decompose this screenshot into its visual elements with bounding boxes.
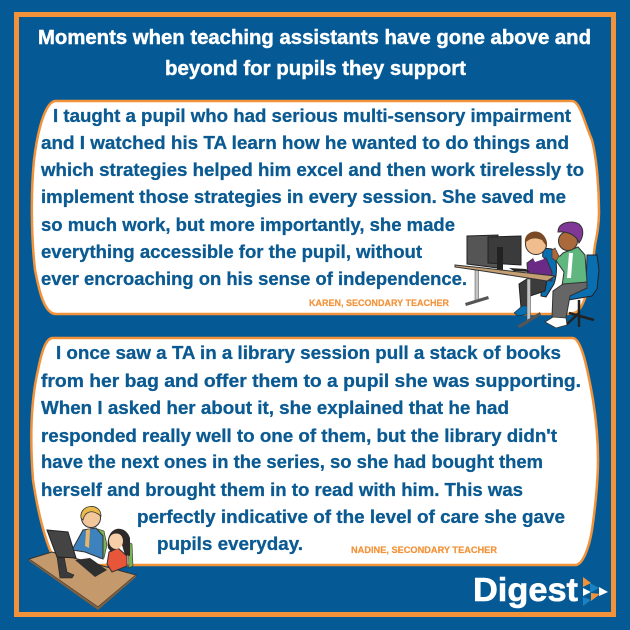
desk — [29, 552, 136, 607]
illustration: teacher and pupil at a desk — [29, 506, 136, 610]
quote text — [40, 105, 584, 289]
icon: triangles — [583, 577, 608, 606]
logo: Digest — [473, 571, 608, 608]
quote text: implement those strategies in every session. She saved me — [41, 186, 566, 207]
title: Moments when teaching assistants have gone above and — [38, 26, 591, 49]
quote text: which strategies helped him excel and then work tirelessly to — [40, 159, 584, 180]
pupil chair — [541, 248, 556, 297]
quote text: perfectly indicative of the level of care she gave — [137, 506, 565, 527]
title — [38, 26, 591, 80]
quote text: I taught a pupil who had serious multi-sensory impairment — [53, 105, 571, 126]
TA chair — [568, 255, 599, 300]
illustration: pupil and TA at a computer — [455, 222, 599, 328]
quote text: so much work, but more importantly, she made — [41, 214, 455, 235]
monitor — [57, 556, 74, 578]
attribution: Nadine: NADINE, SECONDARY TEACHER — [351, 545, 497, 556]
attribution: Karen: KAREN, SECONDARY TEACHER — [309, 298, 449, 309]
TA — [555, 247, 587, 286]
desk legs — [475, 269, 478, 301]
title: beyond for pupils they support — [165, 57, 466, 80]
quote text: ever encroaching on his sense of independence. — [41, 268, 467, 289]
desk — [455, 265, 555, 281]
quote text — [41, 342, 581, 554]
teacher chair — [98, 529, 107, 558]
panel background — [32, 101, 599, 314]
pupil — [527, 258, 552, 281]
keyboard — [75, 558, 107, 577]
quote text: from her bag and offer them to a pupil she was supporting. — [41, 370, 581, 391]
monitors — [467, 235, 498, 268]
pupil chair — [128, 542, 133, 568]
quote text: pupils everyday. — [157, 533, 303, 554]
panel: Nadine quote — [31, 338, 598, 565]
quote text: When I asked her about it, she explained that he had — [41, 397, 509, 418]
pupil — [107, 548, 127, 572]
quote text: have the next ones in the series, so she had bought them — [41, 451, 543, 472]
quote text: and I watched his TA learn how he wanted to do things and — [41, 132, 569, 153]
quote text: I once saw a TA in a library session pull a stack of books — [56, 342, 561, 363]
panel: Karen quote — [32, 101, 599, 314]
quote text: herself and brought them in to read with him. This was — [41, 479, 523, 500]
panel background — [31, 338, 598, 565]
quote text: responded really well to one of them, but the library didn't — [41, 425, 557, 446]
wordmark: Digest — [473, 571, 578, 608]
teacher — [72, 528, 103, 559]
keyboard — [509, 268, 530, 272]
quote text: everything accessible for the pupil, without — [41, 241, 422, 262]
